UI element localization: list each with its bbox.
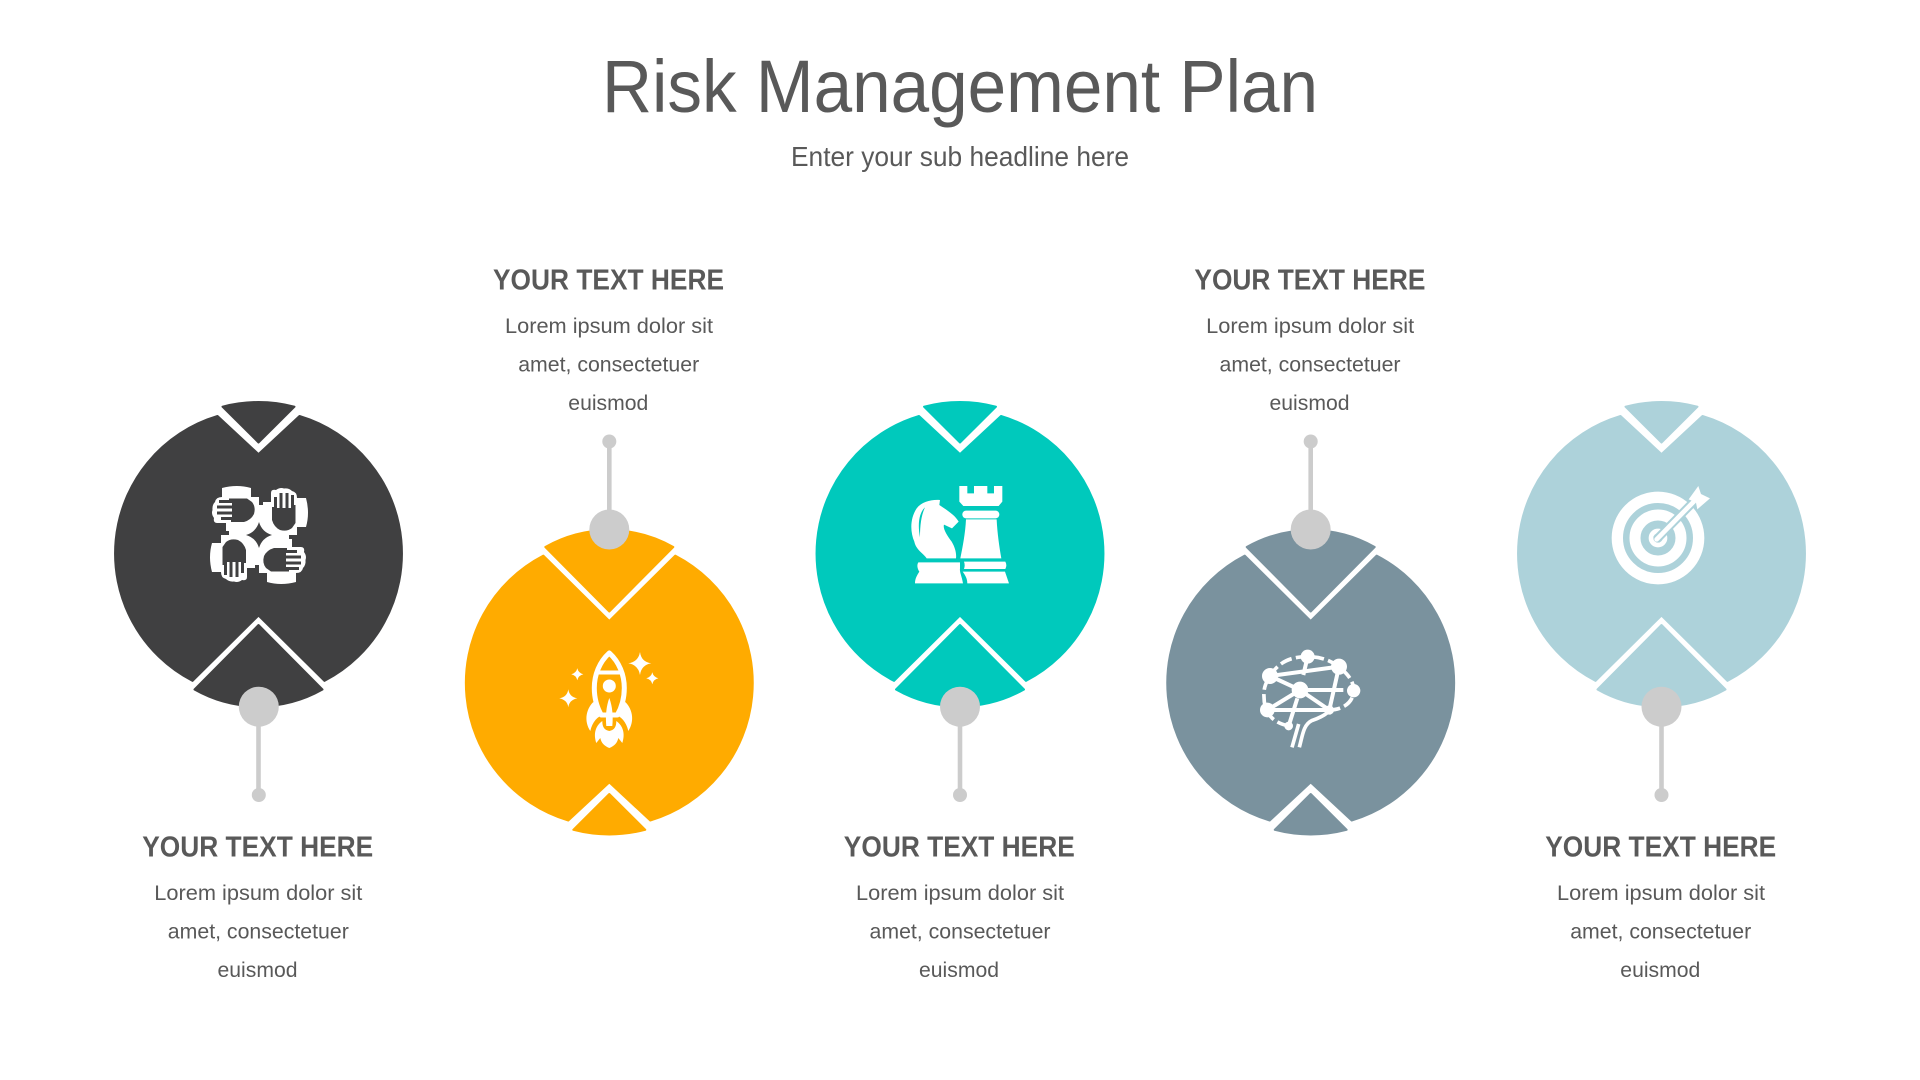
connector [239, 687, 279, 802]
icon: chess knight and rook [911, 486, 1009, 583]
connector [589, 434, 629, 550]
body text 3: amet, consectetuer [870, 920, 1050, 944]
body text 1 [154, 881, 362, 982]
body text 4: amet, consectetuer [1220, 352, 1400, 376]
panel: step 1 dark [115, 402, 402, 982]
dark circle segments [115, 402, 402, 706]
body text 2 [505, 314, 713, 415]
body text 3: euismod [919, 958, 999, 982]
icon: target with arrow [1617, 486, 1710, 579]
title: Risk Management Plan [602, 45, 1318, 128]
heading 3: YOUR TEXT HERE [844, 831, 1075, 863]
icon: four joined hands [210, 486, 308, 584]
heading 5: YOUR TEXT HERE [1545, 831, 1776, 863]
body text 2: amet, consectetuer [518, 352, 699, 376]
white hand silhouettes [210, 486, 308, 584]
body text 5: euismod [1620, 958, 1700, 982]
body text 5: amet, consectetuer [1570, 920, 1751, 944]
teal circle segments [817, 402, 1103, 706]
body text 3 [856, 881, 1064, 982]
body text 3: Lorem ipsum dolor sit [856, 881, 1064, 905]
body text 5 [1557, 881, 1765, 982]
icon: rocket [559, 652, 658, 748]
connector [1642, 687, 1682, 802]
orange circle segments [466, 530, 753, 834]
subtitle: Enter your sub headline here [791, 141, 1129, 172]
panel: step 5 light blue [1518, 402, 1805, 982]
body text 4 [1206, 314, 1414, 415]
body text 4: euismod [1270, 391, 1350, 415]
body text 4: Lorem ipsum dolor sit [1206, 314, 1414, 338]
connector [940, 687, 980, 802]
body text 1: euismod [218, 958, 298, 982]
dark palms and finger gaps [217, 493, 301, 577]
connector [1291, 434, 1331, 550]
heading 1: YOUR TEXT HERE [142, 831, 373, 863]
panel: step 4 slate [1167, 264, 1454, 834]
body text 2: Lorem ipsum dolor sit [505, 314, 713, 338]
light blue circle segments [1518, 402, 1805, 706]
slate circle segments [1167, 530, 1454, 834]
heading 2: YOUR TEXT HERE [493, 264, 724, 296]
body text 1: Lorem ipsum dolor sit [154, 881, 362, 905]
panel: step 3 teal [817, 402, 1103, 982]
heading 4: YOUR TEXT HERE [1194, 264, 1425, 296]
icon: brain network [1260, 650, 1360, 747]
panel: step 2 orange [466, 264, 753, 834]
body text 2: euismod [568, 391, 648, 415]
body text 5: Lorem ipsum dolor sit [1557, 881, 1765, 905]
body text 1: amet, consectetuer [168, 920, 349, 944]
